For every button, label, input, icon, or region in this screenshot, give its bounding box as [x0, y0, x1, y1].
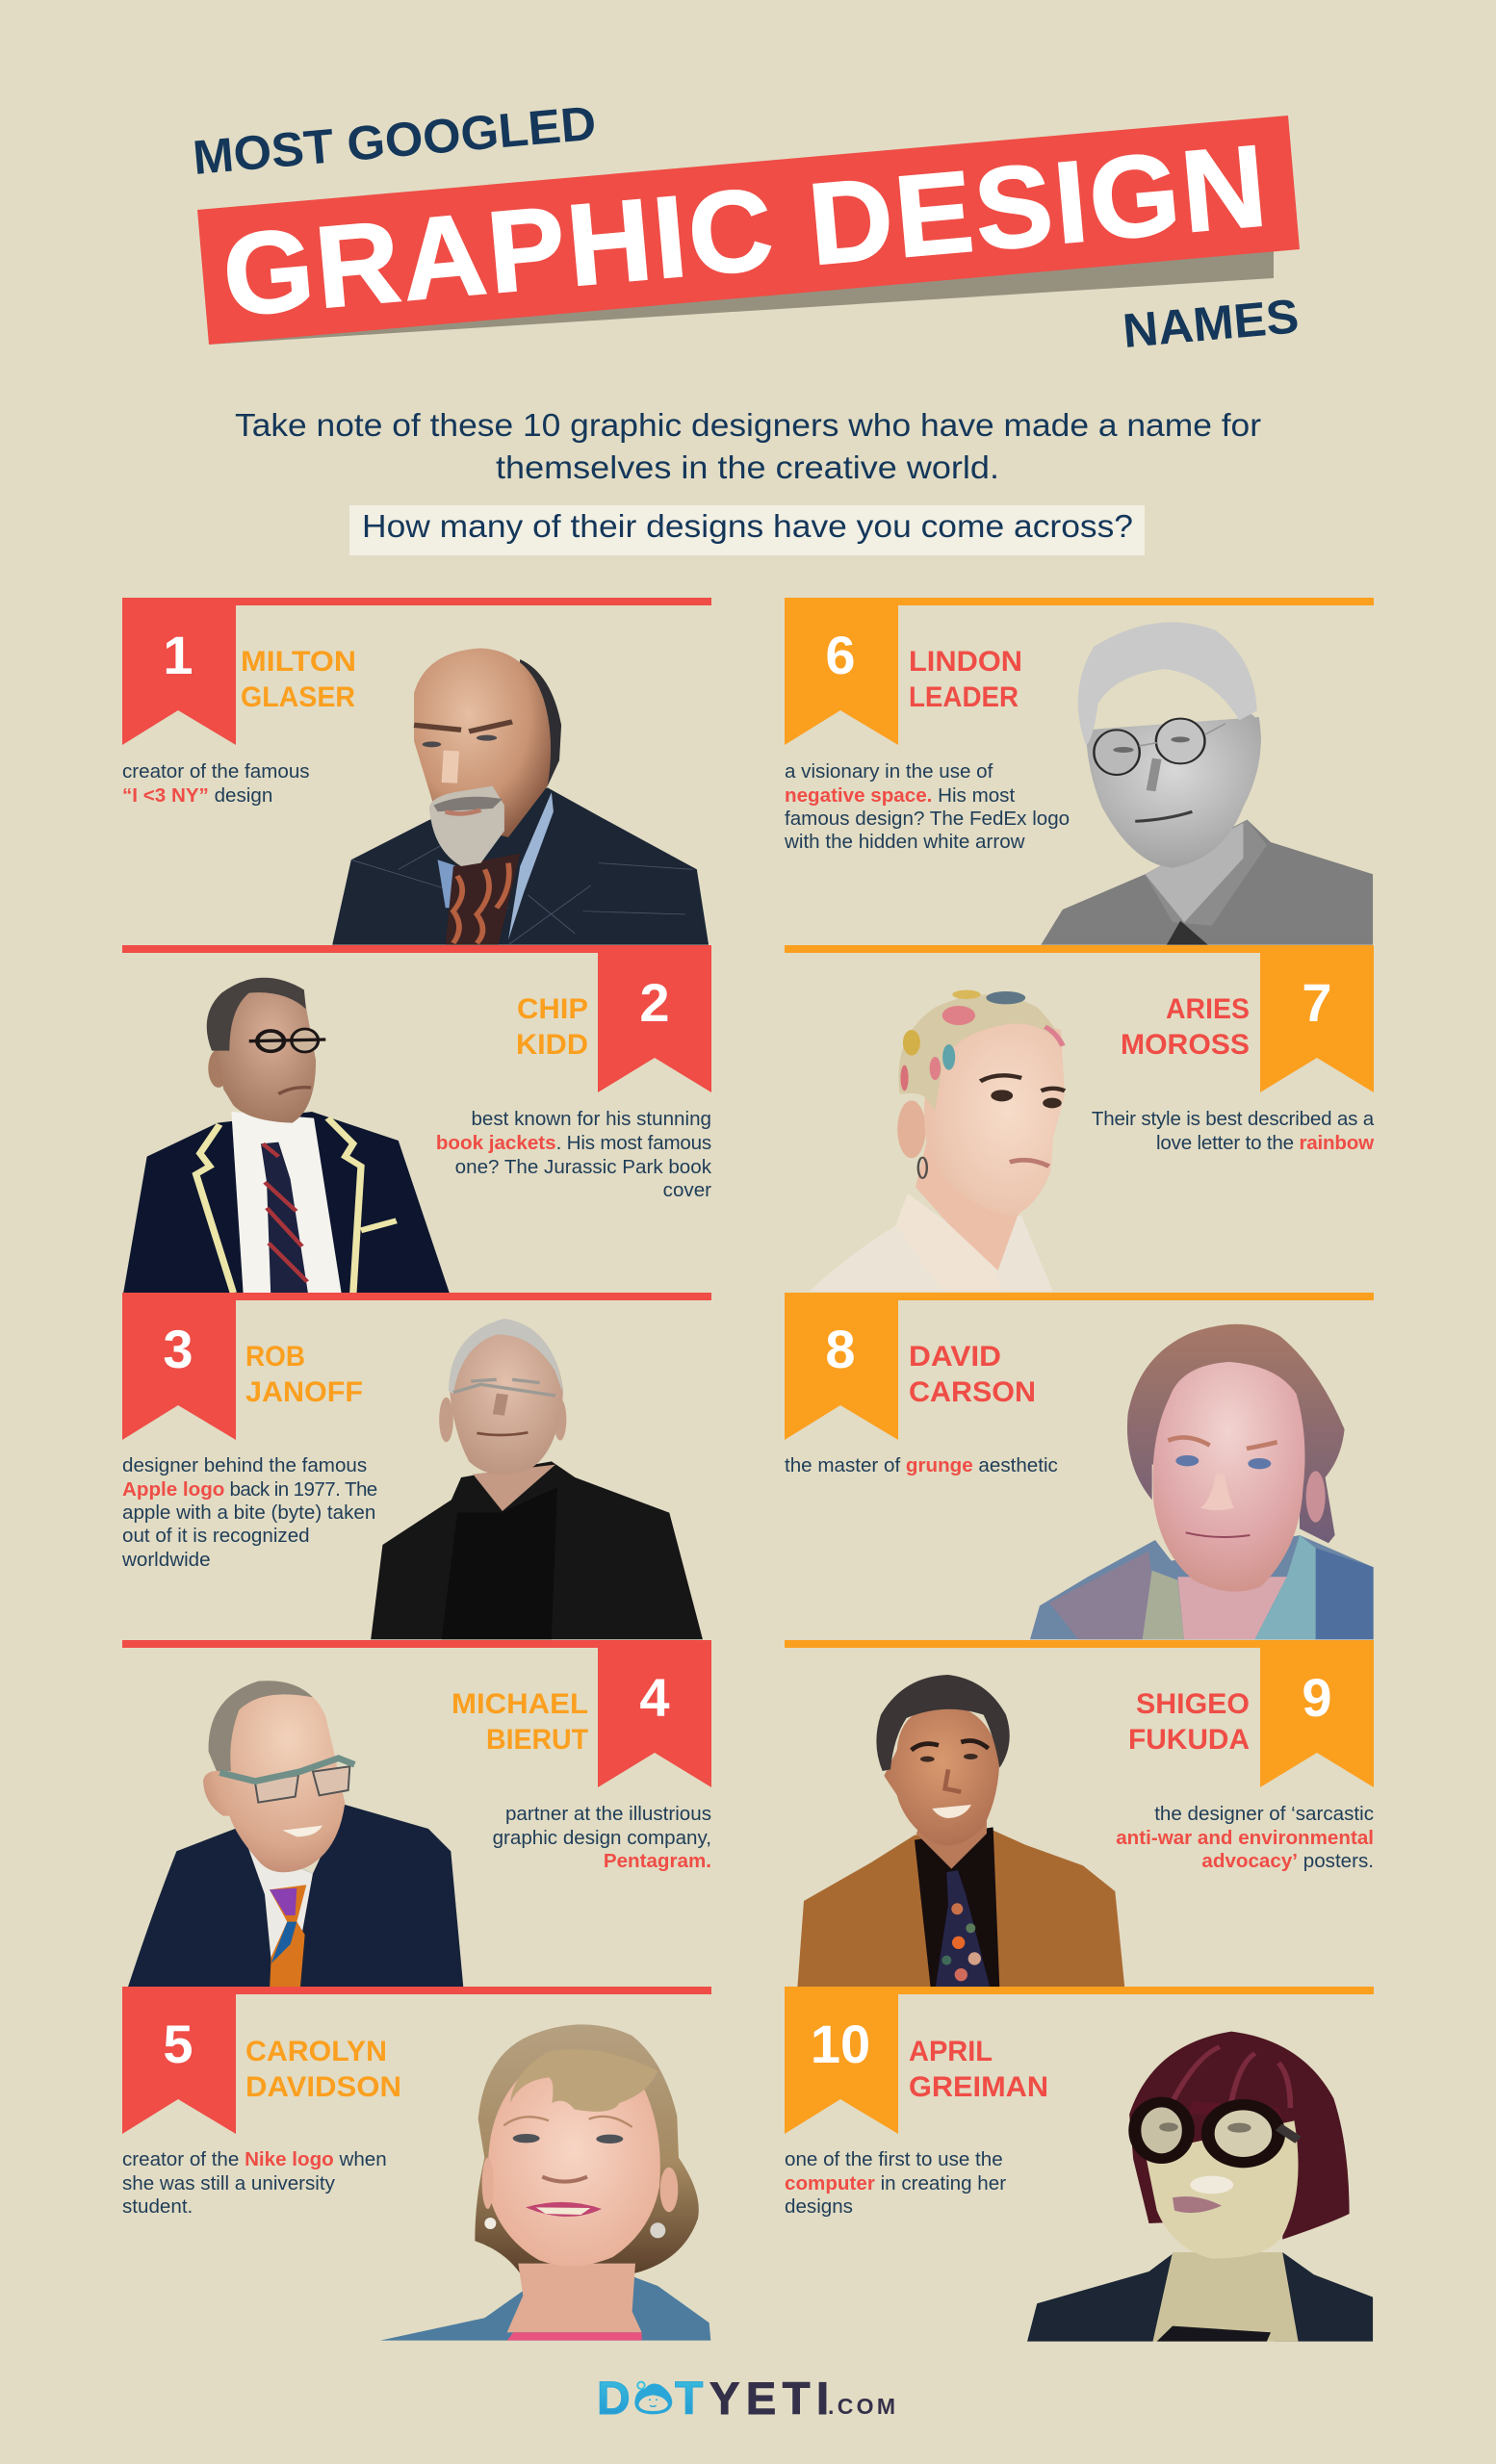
portrait: Shigeo Fukuda [797, 1675, 1124, 1988]
ribbon number 6 [785, 598, 898, 745]
description: creator of the Nike logo when [122, 2148, 387, 2170]
name [909, 2036, 1048, 2103]
description: she was still a university [122, 2172, 336, 2194]
ribbon number 2: 2 [639, 972, 670, 1033]
name [516, 993, 588, 1061]
top rule [785, 1640, 1374, 1648]
description: student. [122, 2195, 193, 2218]
logo: DotYeti.com: T [675, 2374, 703, 2425]
name: LEADER [909, 681, 1019, 713]
ribbon number 5: 5 [163, 2014, 193, 2074]
panel 10: April Greiman [785, 1987, 1374, 2342]
panel 6: Lindon Leader [784, 598, 1374, 945]
name [451, 1688, 588, 1756]
description: cover [663, 1179, 711, 1201]
ribbon number 5 [122, 1987, 236, 2134]
description: a visionary in the use of [785, 760, 993, 783]
name: MICHAEL [451, 1688, 588, 1720]
name: DAVIDSON [245, 2071, 401, 2103]
name [909, 646, 1022, 713]
name: CHIP [517, 993, 588, 1025]
title block [191, 96, 1301, 358]
panel 1: Milton Glaser [122, 598, 711, 945]
ribbon number 9 [1260, 1640, 1374, 1787]
question callout [349, 505, 1145, 555]
ribbon number 4 [598, 1640, 711, 1787]
portrait: Carolyn Davidson [380, 2024, 710, 2341]
description: advocacy’ posters. [1201, 1850, 1374, 1872]
description: Pentagram. [604, 1850, 711, 1872]
question callout: How many of their designs have you come across? [362, 508, 1133, 544]
ribbon number 10 [785, 1987, 898, 2134]
name: BIERUT [486, 1724, 588, 1756]
description: apple with a bite (byte) taken [122, 1502, 375, 1524]
ribbon number 9: 9 [1302, 1667, 1332, 1728]
portrait: Rob Janoff [371, 1319, 703, 1639]
top rule [122, 1987, 711, 1994]
panel 9: Shigeo Fukuda [785, 1640, 1374, 1988]
name [909, 1341, 1036, 1408]
ribbon number 1 [122, 598, 236, 745]
description: with the hidden white arrow [784, 831, 1025, 853]
name: MOROSS [1121, 1029, 1250, 1061]
name: ARIES [1166, 993, 1250, 1025]
description: negative space. His most [785, 784, 1015, 807]
portrait: David Carson [1030, 1324, 1374, 1639]
name: SHIGEO [1136, 1688, 1250, 1720]
description: anti-war and environmental [1116, 1827, 1374, 1849]
top rule [785, 598, 1374, 605]
banner shadow [208, 245, 1274, 345]
top rule [122, 1293, 711, 1300]
description: computer in creating her [785, 2172, 1006, 2194]
name [1128, 1688, 1250, 1756]
name [245, 1341, 363, 1408]
panel 7: Aries Moross [785, 945, 1375, 1292]
description: famous design? The FedEx logo [785, 808, 1070, 830]
name: APRIL [909, 2036, 993, 2067]
heading: names: NAMES [1121, 289, 1301, 358]
ribbon number 8: 8 [825, 1319, 856, 1379]
heading: most googled: MOST GOOGLED [191, 96, 598, 185]
ribbon number 7: 7 [1302, 972, 1332, 1033]
description: worldwide [121, 1549, 211, 1571]
ribbon number 8 [785, 1293, 898, 1440]
description: designs [785, 2195, 853, 2218]
red banner [197, 116, 1300, 345]
ribbon number 7 [1260, 945, 1374, 1092]
name: ROB [245, 1341, 305, 1373]
description: designer behind the famous [122, 1454, 367, 1476]
logo: DotYeti.com: .COM [828, 2394, 895, 2419]
description: graphic design company, [493, 1827, 711, 1849]
name: CARSON [909, 1376, 1036, 1408]
intro text: Take note of these 10 graphic designers who have made a name for [235, 407, 1261, 443]
description: partner at the illustrious [505, 1803, 711, 1825]
description: Their style is best described as a [1092, 1108, 1374, 1130]
description: love letter to the rainbow [1156, 1132, 1374, 1154]
ribbon number 3 [122, 1293, 236, 1440]
portrait: Chip Kidd [123, 978, 450, 1293]
name: DAVID [909, 1341, 1001, 1373]
top rule [785, 945, 1374, 953]
name: KIDD [516, 1029, 588, 1061]
name [245, 2036, 401, 2103]
panel 4: Michael Bierut [122, 1640, 711, 1990]
intro text: themselves in the creative world. [496, 449, 999, 485]
name: CAROLYN [245, 2036, 387, 2067]
top rule [122, 598, 711, 605]
name [241, 646, 356, 713]
intro text [235, 407, 1261, 485]
name: JANOFF [245, 1376, 363, 1408]
description: design [209, 784, 272, 807]
ribbon number 2 [598, 945, 711, 1092]
description: the master of grunge aesthetic [785, 1454, 1058, 1476]
icon: yeti face [634, 2382, 672, 2414]
top rule [122, 945, 711, 953]
description: one of the first to use the [785, 2148, 1003, 2170]
top rule [122, 1640, 711, 1648]
portrait: Aries Moross [810, 990, 1065, 1292]
description: best known for his stunning [471, 1108, 711, 1130]
description: Apple logo back in 1977. The [122, 1478, 377, 1501]
description: out of it is recognized [122, 1525, 310, 1547]
top rule [785, 1293, 1374, 1300]
description: “I <3 NY” [122, 784, 209, 807]
description: the designer of ‘sarcastic [1154, 1803, 1374, 1825]
name: GREIMAN [909, 2071, 1048, 2103]
heading: graphic design: GRAPHIC DESIGN [219, 121, 1271, 341]
logo: DotYeti.com: YETI [709, 2373, 829, 2424]
name: FUKUDA [1128, 1724, 1250, 1756]
logo: DotYeti.com [597, 2373, 895, 2425]
portrait: April Greiman [1027, 2032, 1373, 2342]
ribbon number 3: 3 [163, 1319, 193, 1379]
ribbon number 10: 10 [811, 2014, 870, 2074]
portrait: Lindon Leader [1041, 622, 1373, 945]
description: one? The Jurassic Park book [455, 1156, 712, 1178]
ribbon number 6: 6 [825, 625, 856, 685]
ribbon number 1: 1 [163, 625, 193, 685]
name [1121, 993, 1250, 1061]
name: LINDON [909, 646, 1022, 678]
name: MILTON [241, 646, 356, 678]
panel 3: Rob Janoff [121, 1293, 711, 1639]
panel 5: Carolyn Davidson [122, 1987, 711, 2341]
description: book jackets. His most famous [436, 1132, 711, 1154]
top rule [785, 1987, 1374, 1994]
name: GLASER [241, 681, 355, 713]
portrait: Milton Glaser [332, 648, 709, 945]
portrait: Michael Bierut [127, 1681, 464, 1990]
panel 2: Chip Kidd [122, 945, 712, 1293]
description: creator of the famous [122, 760, 310, 783]
logo: DotYeti.com: D [597, 2374, 631, 2425]
panel 8: David Carson [785, 1293, 1374, 1639]
ribbon number 4: 4 [639, 1667, 670, 1728]
